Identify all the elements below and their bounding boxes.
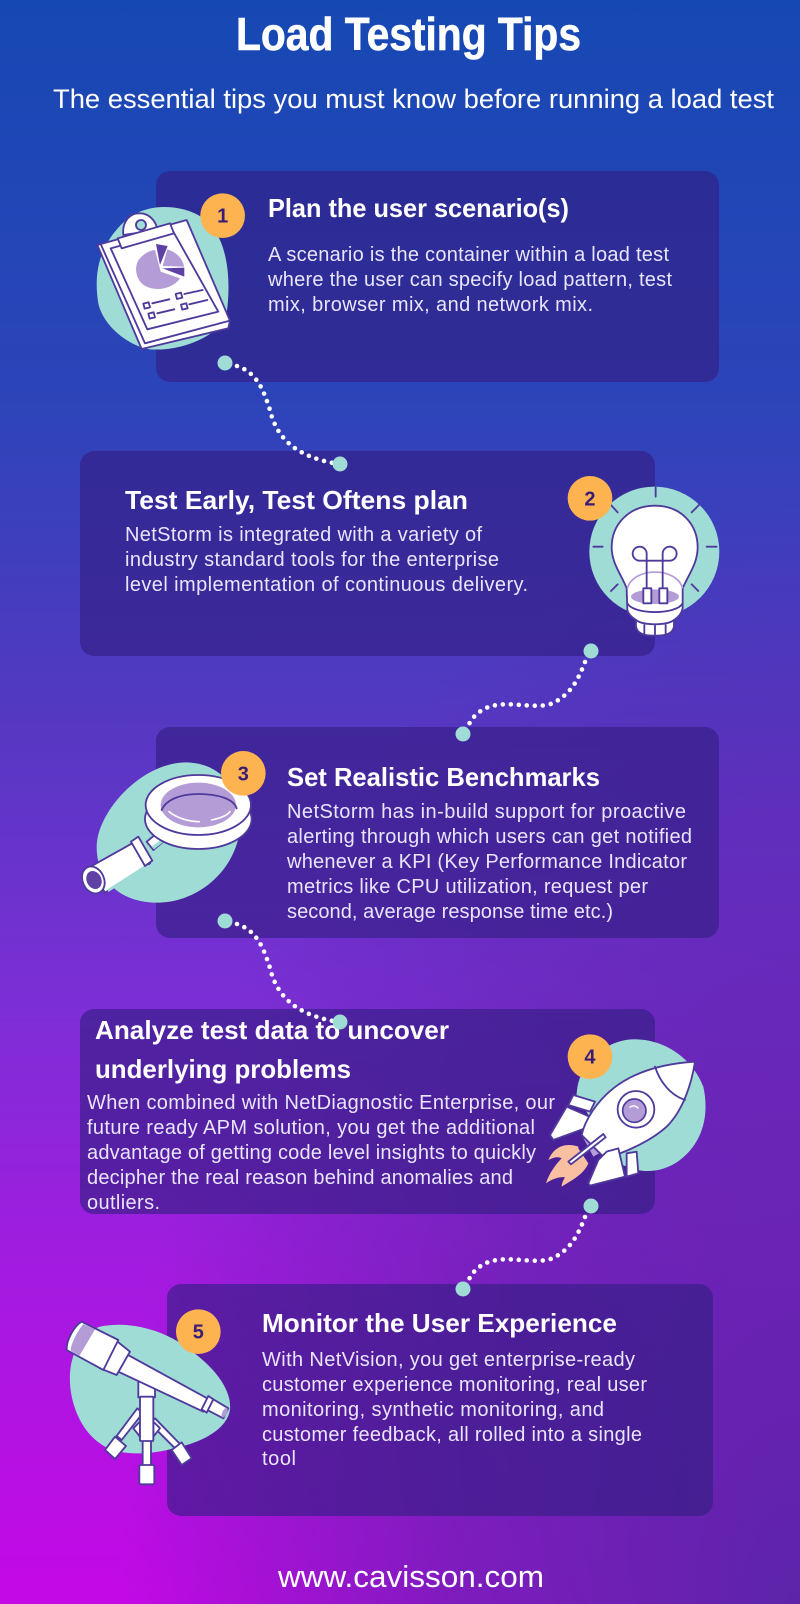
heading 4 [95,1015,449,1084]
panel 4: analyze test data [80,1009,655,1214]
body text 5 [262,1349,647,1470]
body text 2: NetStorm is integrated with a variety of [125,524,482,546]
body text 1: mix, browser mix, and network mix. [268,294,593,316]
body text 5: With NetVision, you get enterprise-ready [262,1349,635,1371]
body text 5: monitoring, synthetic monitoring, and [262,1399,604,1421]
badge 4: 4 [584,1047,596,1069]
badge 5 [176,1309,221,1354]
panel 5: monitor the user experience [167,1284,713,1516]
body text 4: When combined with NetDiagnostic Enterprise, our [87,1092,555,1114]
body text 2 [125,524,528,596]
body text 3: whenever a KPI (Key Performance Indicator [286,851,687,873]
badge 4 [568,1034,612,1079]
body text 1: A scenario is the container within a load test [268,244,669,266]
icon: telescope [67,1322,230,1484]
body text 4: future ready APM solution, you get the additional [87,1117,535,1139]
icon: clipboard with pie chart [97,207,230,350]
body text 4: outliers. [87,1192,160,1214]
body text 5: customer experience monitoring, real user [262,1374,647,1396]
body text 4: advantage of getting code level insights to quickly [87,1142,536,1164]
body text 4 [87,1092,555,1214]
body text 5: tool [262,1448,296,1470]
connector 4 [456,1198,598,1296]
badge 2: 2 [584,488,596,510]
body text 4: decipher the real reason behind anomalies and [87,1167,513,1189]
body text 2: industry standard tools for the enterprise [125,549,499,571]
title: Load Testing Tips [236,8,581,60]
connector 1 [218,356,348,472]
heading 3: Set Realistic Benchmarks [287,762,600,792]
body text 2: level implementation of continuous delivery. [125,574,528,596]
body text 3: NetStorm has in-build support for proactive [287,801,686,823]
connector 2 [456,644,598,742]
badge 3: 3 [238,763,249,785]
website footer: www.cavisson.com [277,1559,544,1594]
heading 1: Plan the user scenario(s) [268,193,569,223]
badge 5: 5 [193,1322,204,1344]
icon: rocket [546,1039,706,1187]
panel 1: plan the user scenarios [156,171,719,382]
body text 5: customer feedback, all rolled into a single [262,1424,642,1446]
heading 4: underlying problems [95,1054,351,1084]
icon: light bulb [589,487,719,636]
body text 3: second, average response time etc.) [287,901,613,923]
panel 3: set realistic benchmarks [156,727,719,938]
badge 1 [200,193,245,238]
icon: magnifying glass [78,762,252,903]
body text 3: metrics like CPU utilization, request per [287,876,648,898]
heading 2: Test Early, Test Oftens plan [125,485,468,515]
badge 1: 1 [217,206,228,228]
badge 2 [568,476,612,521]
body text 1 [267,244,672,316]
body text 1: where the user can specify load pattern, test [267,269,672,291]
subtitle: The essential tips you must know before running a load test [53,84,774,114]
heading 5: Monitor the User Experience [262,1308,617,1338]
panel 2: test early [80,451,655,656]
connector 3 [218,914,348,1030]
body text 3 [286,801,692,923]
body text 3: alerting through which users can get notified [287,826,692,848]
badge 3 [221,751,266,796]
heading 4: Analyze test data to uncover [95,1015,449,1045]
